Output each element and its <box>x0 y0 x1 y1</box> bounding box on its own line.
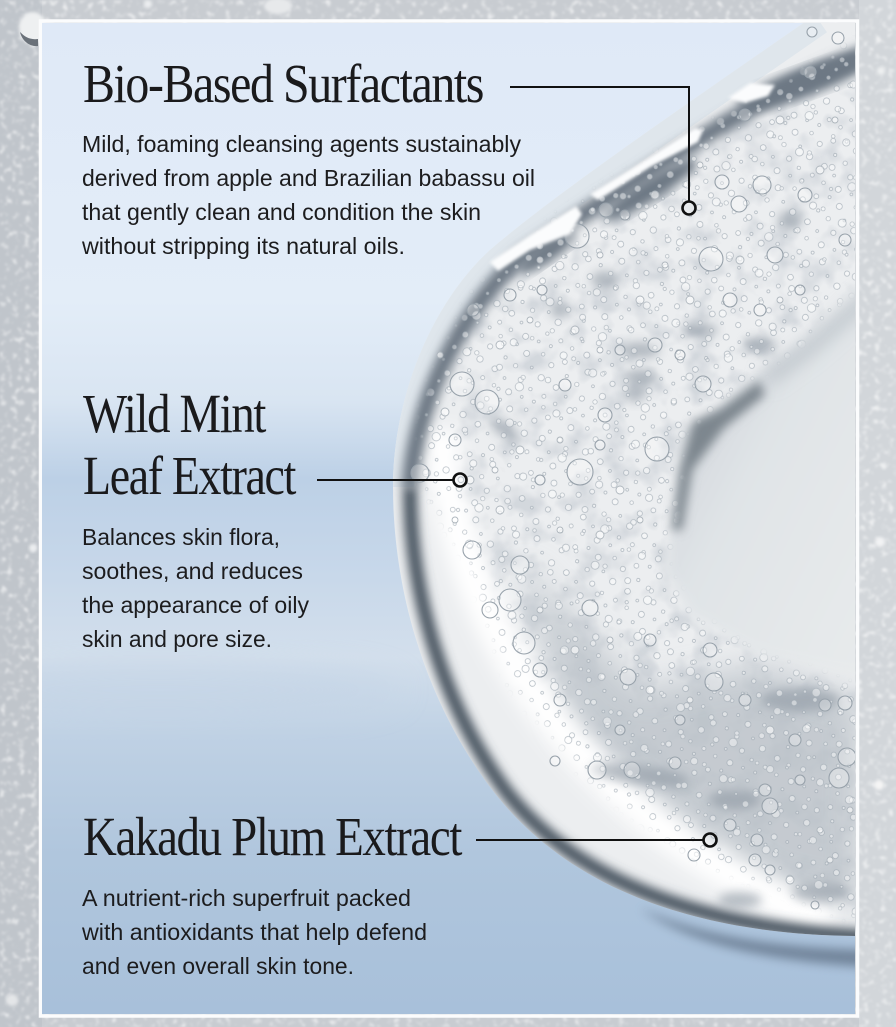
description: Wild Mint Leaf Extract: the appearance of oily <box>82 592 309 618</box>
white highlight streaks <box>490 83 775 271</box>
gel drop shadow <box>640 908 880 968</box>
pale top rim <box>393 15 815 487</box>
description: Kakadu Plum Extract: with antioxidants that help defend <box>81 919 427 945</box>
heading: Wild Mint Leaf Extract <box>83 383 296 506</box>
description: Wild Mint Leaf Extract <box>82 524 309 652</box>
description: Bio-Based Surfactants: Mild, foaming cleansing agents sustainably <box>82 131 521 157</box>
dark inner rim <box>410 52 870 487</box>
tiny foam bubbles <box>418 44 855 918</box>
description: Bio-Based Surfactants: derived from apple and Brazilian babassu oil <box>82 165 535 191</box>
section: Kakadu Plum Extract <box>81 806 716 979</box>
leader line to gel top <box>510 87 696 214</box>
large bubbles <box>411 27 856 909</box>
description: Kakadu Plum Extract: A nutrient-rich superfruit packed <box>82 885 411 911</box>
leader line to gel bottom <box>476 834 716 846</box>
description: Wild Mint Leaf Extract: skin and pore size. <box>82 626 272 652</box>
gel body <box>393 23 855 936</box>
grey mottled patches <box>486 210 848 908</box>
leader line to gel middle <box>317 474 466 486</box>
heading: Bio-Based Surfactants: Bio-Based Surfactants <box>83 53 483 114</box>
central hollow <box>670 322 855 638</box>
section: Bio-Based Surfactants <box>81 53 696 259</box>
description: Wild Mint Leaf Extract: Balances skin flora, <box>82 524 280 550</box>
heading: Kakadu Plum Extract: Kakadu Plum Extract <box>83 806 462 867</box>
description: Bio-Based Surfactants: that gently clean and condition the skin <box>82 199 481 225</box>
description: Wild Mint Leaf Extract: soothes, and reduces <box>82 558 303 584</box>
description: Kakadu Plum Extract: and even overall skin tone. <box>82 953 354 979</box>
small bubbles <box>437 116 853 884</box>
description: Kakadu Plum Extract <box>81 885 427 979</box>
section: Wild Mint Leaf Extract <box>82 383 466 652</box>
heading: Wild Mint Leaf Extract: Leaf Extract <box>83 445 296 506</box>
description: Bio-Based Surfactants <box>81 131 535 259</box>
description: Bio-Based Surfactants: without stripping its natural oils. <box>81 233 405 259</box>
heading: Wild Mint Leaf Extract: Wild Mint <box>83 383 266 444</box>
